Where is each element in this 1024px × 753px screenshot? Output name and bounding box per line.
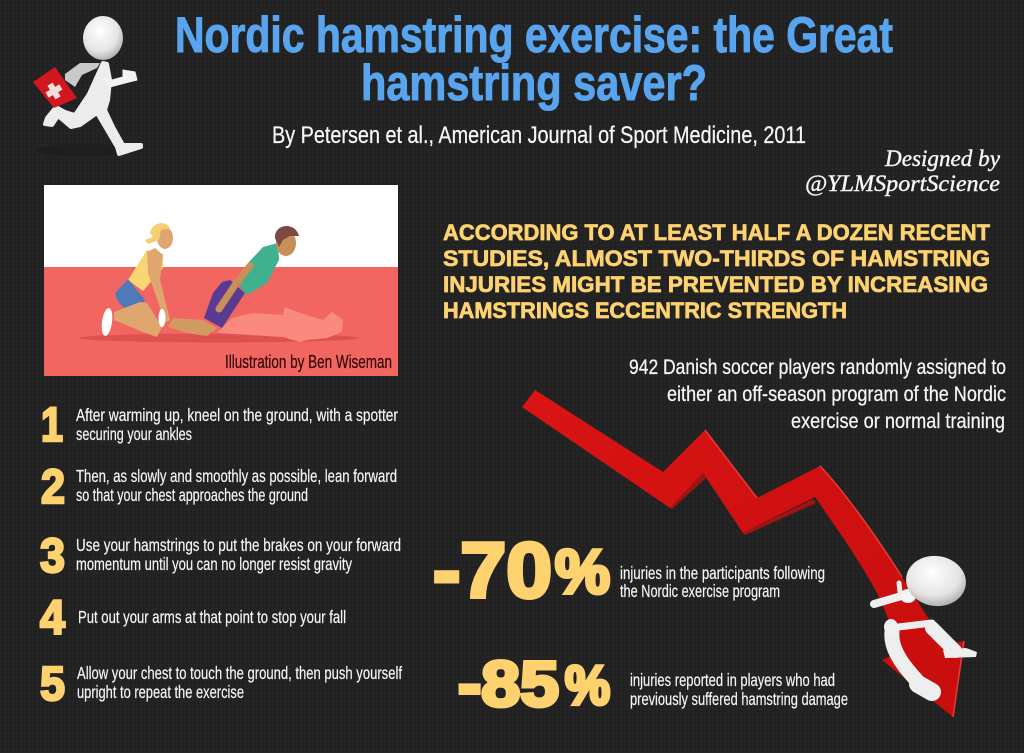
falling red arrow (522, 390, 964, 717)
stat: minus 85 percent (458, 648, 848, 720)
ghost figure: chest lowered to the ground (217, 307, 343, 342)
step 5: 5 (40, 658, 65, 711)
callout: eccentric strength statement: INJURIES MIGHT BE PREVENTED BY INCREASING (443, 272, 988, 297)
stat: minus 70 percent (433, 526, 825, 614)
icon: red first aid case (33, 67, 77, 108)
callout: eccentric strength statement: STUDIES, ALMOST TWO-THIRDS OF HAMSTRING (443, 246, 990, 271)
stat: minus 85 percent: % (565, 654, 610, 716)
caption: Illustration by Ben Wiseman (225, 352, 392, 372)
step 2: Then, as slowly and smoothly as possible, lean forward (76, 466, 397, 486)
step 3 (40, 530, 401, 583)
step 3: momentum until you can no longer resist gravity (76, 554, 352, 574)
stat: minus 70 percent: -70 (433, 526, 552, 614)
stat: minus 85 percent: previously suffered hamstring damage (630, 689, 848, 709)
step 1: securing your ankles (76, 424, 192, 444)
stat: minus 70 percent: % (555, 538, 610, 607)
man leaning forward (168, 226, 299, 336)
step 4: 4 (40, 592, 65, 645)
title (175, 7, 893, 111)
step 2: so that your chest approaches the ground (76, 485, 308, 505)
stat: minus 85 percent: -85 (458, 648, 559, 720)
icon: running figure with first aid case (33, 16, 141, 156)
step 5: upright to repeat the exercise (77, 682, 244, 702)
step 1: 1 (41, 399, 63, 452)
icon: figure clinging to the arrow (874, 552, 977, 692)
illustration: partner-assisted Nordic exercise (44, 185, 398, 376)
title: hamstring saver? (361, 55, 707, 111)
step 5 (40, 658, 402, 711)
byline: By Petersen et al., American Journal of Sport Medicine, 2011 (272, 122, 806, 149)
step 4 (40, 592, 346, 645)
stat: minus 85 percent: injuries reported in players who had (630, 670, 835, 690)
woman spotter (100, 223, 173, 337)
study description (629, 355, 1006, 433)
stat: minus 70 percent: injuries in the participants following (620, 563, 825, 583)
designer credit (805, 146, 1001, 196)
step 4: Put out your arms at that point to stop your fall (78, 607, 346, 627)
designer credit: @YLMSportScience (805, 171, 1000, 196)
step 5: Allow your chest to touch the ground, then push yourself (77, 663, 402, 683)
step 2: 2 (41, 461, 65, 514)
callout: eccentric strength statement: ACCORDING TO AT LEAST HALF A DOZEN RECENT (443, 220, 991, 245)
step 1: After warming up, kneel on the ground, with a spotter (76, 405, 398, 425)
designer credit: Designed by (884, 146, 1001, 171)
stat: minus 70 percent: the Nordic exercise program (620, 581, 780, 601)
callout: eccentric strength statement: HAMSTRINGS ECCENTRIC STRENGTH (443, 298, 847, 323)
step 3: 3 (40, 530, 65, 583)
step 2 (41, 461, 397, 514)
callout: eccentric strength statement (443, 220, 991, 323)
step 1 (41, 399, 398, 452)
step 3: Use your hamstrings to put the brakes on your forward (76, 535, 401, 555)
